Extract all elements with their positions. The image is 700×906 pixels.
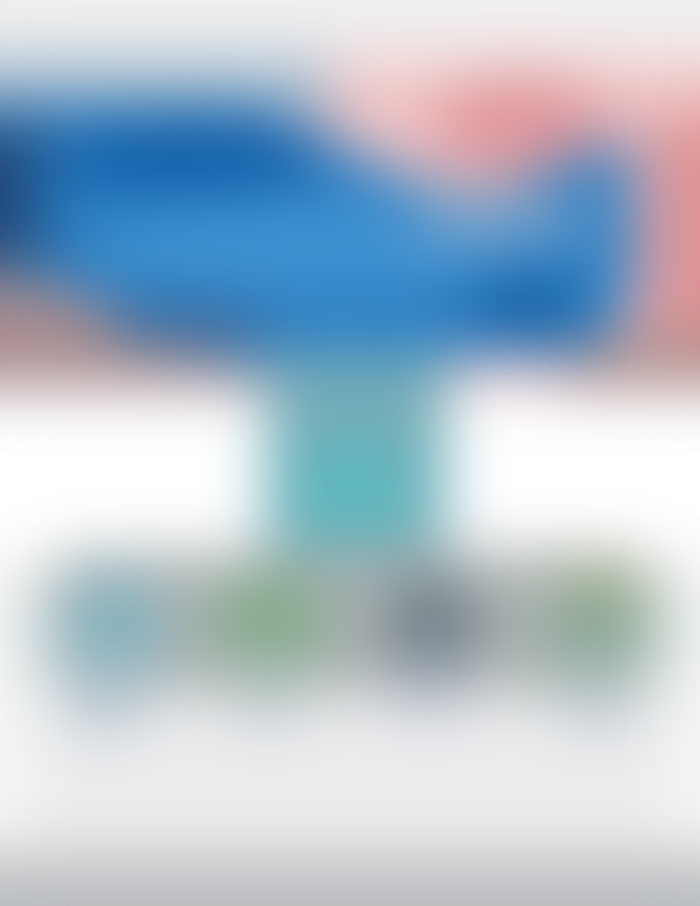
footer band bbox=[0, 858, 700, 906]
header top-left haze bbox=[0, 60, 330, 115]
icon: circle 2 bbox=[214, 570, 326, 720]
ribbon lower-right shade bbox=[467, 274, 583, 342]
lower panel inner area bbox=[30, 690, 670, 850]
pink accent bbox=[430, 75, 610, 175]
icon: circle 1 bbox=[58, 572, 166, 729]
lower right muted band bbox=[560, 335, 700, 387]
ribbon central highlight bbox=[90, 199, 510, 291]
blue ribbon banner bbox=[0, 105, 636, 362]
white content band bbox=[0, 396, 700, 556]
ribbon dark left end bbox=[0, 125, 40, 265]
ribbon upper shade bbox=[50, 121, 330, 189]
ribbon right highlight bbox=[405, 196, 595, 248]
icon: circle 3 bbox=[382, 576, 482, 708]
lower left muted band bbox=[0, 262, 270, 386]
lower panel bbox=[0, 556, 700, 852]
icon: circle 4 bbox=[544, 562, 656, 725]
right pink edge bbox=[652, 115, 700, 340]
row of circle icons backdrop bbox=[44, 552, 658, 692]
column bright spot bbox=[286, 440, 418, 540]
ribbon lower shade bbox=[110, 301, 270, 349]
central teal column bbox=[266, 352, 446, 562]
header pink band bbox=[0, 62, 700, 387]
